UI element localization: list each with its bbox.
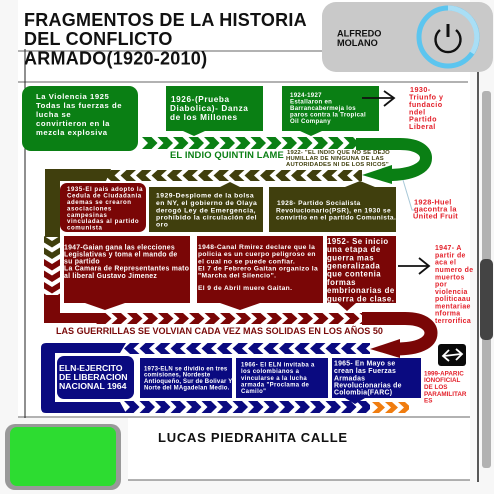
panel: ELN: DE LIBERACION: [59, 372, 128, 382]
callout: 1947: nforma: [435, 310, 460, 318]
callout: 1947: politicaau: [435, 296, 471, 303]
panel: 1952: [327, 236, 396, 311]
green chevrons: [142, 137, 359, 149]
panel: 1952: embrionarias de: [327, 286, 395, 295]
panel: 1928 PSR: convirtio en el partido Comunista.: [276, 214, 396, 222]
panel: 1947: 1947-Gaian gana las elecciones: [64, 244, 175, 252]
panel: 1926 Prueba Diabolica: de los Millones: [170, 113, 238, 122]
panel: 1928 PSR: [269, 181, 396, 232]
callout: 1930: ndel: [409, 108, 426, 116]
callout: 1930: Partido: [409, 114, 437, 124]
callout: 1947: violencia: [435, 289, 468, 296]
navy bracket and chevrons: [41, 343, 409, 413]
panel: 1966: armada "Proclama de: [241, 382, 310, 388]
panel: 1965: Revolucionarias de: [334, 382, 402, 390]
panel: 1973: Norte del MAgadelan Medio.: [144, 386, 230, 392]
panel: 1952: formas: [327, 278, 356, 287]
callout: 1947: por: [435, 282, 447, 288]
panel: 1924-1927: Barrancabermeja los: [290, 105, 356, 112]
panel: 1924-1927: [282, 86, 379, 136]
panel: 1948: 1948-Canal Rmirez declare que la: [198, 244, 315, 251]
panel: 1965: crean las Fuerzas: [334, 368, 396, 375]
callout: 1928: gacontra la: [414, 204, 457, 214]
panel: 1973: 1973-ELN se dividio en tres: [144, 366, 228, 372]
panel: 1948: policia es un cuerpo peligroso en: [198, 251, 316, 258]
callout: 1930: Triunfo y: [409, 92, 443, 102]
panel: 1965: Armadas: [334, 376, 365, 382]
scrollbar: [480, 91, 493, 468]
panel: 1966: los colombianos a: [241, 369, 300, 375]
panel: La Violencia 1925: La Violencia 1925: [36, 92, 109, 101]
callout: 1928: 1928-Huel: [414, 198, 452, 206]
panel: 1935: ademas se crearon: [67, 199, 132, 206]
quote: 1922: [286, 150, 390, 168]
author: Lucas Piedrahita Calle: LUCAS PIEDRAHITA CALLE: [158, 430, 348, 445]
callout: 1947: mentariae: [435, 304, 471, 310]
panel: ELN: NACIONAL 1964: [59, 381, 127, 391]
callout: 1947: terrorifica: [435, 318, 471, 325]
panel: 1947: al liberal Gustavo Jimenez: [64, 273, 157, 280]
callout: 1999: DE LOS: [424, 384, 447, 391]
panel: 1952: 1952- Se inicio: [327, 237, 389, 246]
panel: 1935: Cedula de Ciudadania: [67, 192, 142, 200]
panel: 1952: guerra de clase.: [327, 294, 394, 304]
panel: 1924-1927: Oil Company: [290, 118, 331, 125]
callout: 1999: IONOFICIAL: [424, 377, 461, 384]
green status box: [5, 424, 121, 490]
panel: 1952: una etapa de: [327, 245, 381, 254]
green curved arrow: [356, 144, 426, 184]
panel: 1926 Prueba Diabolica: [166, 86, 263, 136]
title: ARMADO(1920-2010): [24, 48, 207, 68]
quote: 1922: 1922- "EL INDIO QUE NO SE DEJO: [287, 150, 390, 156]
panel: 1935: [60, 183, 146, 232]
panel: 1924-1927: 1924-1927: [290, 92, 322, 99]
callout: 1930: 1930-: [410, 85, 431, 94]
panel: 1952: guerra mas: [327, 254, 374, 262]
panel: 1947: La Camara de Representantes mato: [64, 266, 189, 272]
panel: 1929: [149, 182, 263, 232]
callout: 1928: United Fruit: [413, 212, 458, 220]
panel: 1966: [236, 358, 328, 398]
title: FRAGMENTOS DE LA HISTORIA: [24, 10, 307, 30]
panel: 1966: 1966- El ELN invitaba a: [241, 362, 315, 368]
callout: 1930: [409, 85, 443, 131]
panel: 1935: asociaciones: [67, 206, 112, 212]
callout: 1930: fundacio: [409, 100, 443, 109]
panel: 1952: generalizada: [327, 262, 380, 270]
callout: 1947: aca el: [435, 260, 456, 266]
connector: 1928 huelga: [403, 180, 415, 210]
callout: 1947: [435, 245, 473, 325]
panel: La Violencia 1925: convirtieron en la: [36, 119, 110, 128]
panel: 1965: Colombia(FARC): [334, 390, 392, 396]
panel: 1935: 1935-El pais adopto la: [67, 186, 143, 193]
quote: 1922: HUMILLAR DE NINGUNA DE LAS: [286, 156, 384, 162]
red curved arrow: [362, 318, 431, 358]
panel: 1966: vincularse a la lucha: [241, 376, 307, 382]
icon: power button: [419, 8, 477, 66]
panel: 1935: comunista: [67, 224, 102, 232]
panel: La Violencia 1925: [22, 86, 138, 151]
callout: 1999: PARAMILITAR: [424, 391, 467, 398]
olive chevrons and bracket: [44, 169, 362, 259]
panel: 1966: Camilo": [241, 389, 266, 395]
panel: 1926 Prueba Diabolica: Diabolica)- Danza: [170, 104, 248, 113]
title: DEL CONFLICTO: [24, 29, 173, 49]
panel: 1926 Prueba Diabolica: 1926-(Prueba: [171, 95, 230, 104]
panel: 1965: [332, 358, 421, 404]
panel: 1948: El 7 de Febrero Gaitan organizo la: [198, 266, 318, 272]
panel: 1947: [64, 236, 190, 310]
callout: 1999: [424, 370, 467, 404]
panel: 1929: 1929-Desplome de la bolsa: [156, 192, 254, 200]
panel: 1935: campesinas: [67, 212, 107, 219]
panel: 1948: "Marcha del Silencio".: [198, 272, 276, 280]
panel: 1973: Antioqueño, Sur de Bolivar Y: [144, 379, 232, 385]
callout: 1947: numero de: [435, 267, 473, 274]
panel: ELN: [57, 356, 134, 399]
panel: 1948: el cual no se puede confiar.: [198, 258, 295, 266]
panel: La Violencia 1925: Todas las fuerzas de: [36, 101, 122, 110]
panel: 1929: en NY, el gobierno de Olaya: [156, 200, 257, 207]
panel: 1973: comisiones, Nordeste: [144, 372, 211, 378]
panel: 1928 PSR: Revolucionario(PSR), en 1930 se: [276, 208, 391, 214]
callout: 1930: Liberal: [409, 122, 436, 131]
panel: 1948: El 9 de Abril muere Gaitan.: [198, 285, 292, 292]
panel: author and power icon: [322, 2, 493, 72]
callout: 1947: muertos: [435, 274, 465, 282]
panel: 1965: 1965- En Mayo se: [334, 360, 395, 368]
panel: 1947: su partido: [64, 258, 100, 266]
heading: El indio Quintin Lame: EL INDIO QUINTIN LAME: [170, 149, 284, 160]
callout: 1947: partir de: [435, 252, 466, 260]
panel: 1924-1927: Estallaron en: [290, 98, 332, 106]
panel: 1948: [197, 236, 323, 310]
quote: 1922: AUTORIDADES NI DE LOS RICOS": [286, 162, 389, 168]
author name: MOLANO: [337, 38, 378, 48]
panel: La Violencia 1925: mezcla explosiva: [36, 128, 108, 137]
panel: 1929: derogó Ley de Emergencia,: [156, 208, 256, 214]
title: [24, 10, 307, 68]
author name: ALFREDO: [337, 28, 381, 38]
panel: 1929: oro: [156, 222, 168, 228]
panel: La Violencia 1925: lucha se: [36, 110, 71, 119]
author name: [337, 28, 381, 48]
panel: 1929: prohibido la circulación del: [156, 214, 257, 222]
callout: 1928: [413, 198, 458, 220]
panel: 1935: vinculadas al partido: [67, 218, 139, 225]
heading: Las guerrillas: LAS GUERRILLAS SE VOLVIAN CADA VEZ MAS SOLIDAS EN LOS AÑOS 50: [56, 326, 383, 336]
arrow: to 1947: [398, 258, 429, 274]
panel: ELN: ELN-EJERCITO: [59, 363, 123, 373]
panel: 1973: [140, 358, 232, 398]
panel: 1924-1927: paros contra la Tropical: [290, 112, 366, 118]
arrow: to 1930: [362, 91, 394, 106]
panel: 1947: Legislativas y toma el mando de: [64, 252, 177, 258]
callout: 1999: ES: [424, 398, 432, 404]
callout: 1999: 1999-APARIC: [424, 370, 464, 378]
panel: 1952: que contenia: [327, 270, 381, 278]
panel: 1928 PSR: 1928- Partido Socialista: [277, 200, 361, 207]
red chevrons and bracket: [44, 259, 364, 324]
callout: 1947: 1947- A: [435, 245, 462, 252]
icon: double arrow: [438, 344, 466, 366]
